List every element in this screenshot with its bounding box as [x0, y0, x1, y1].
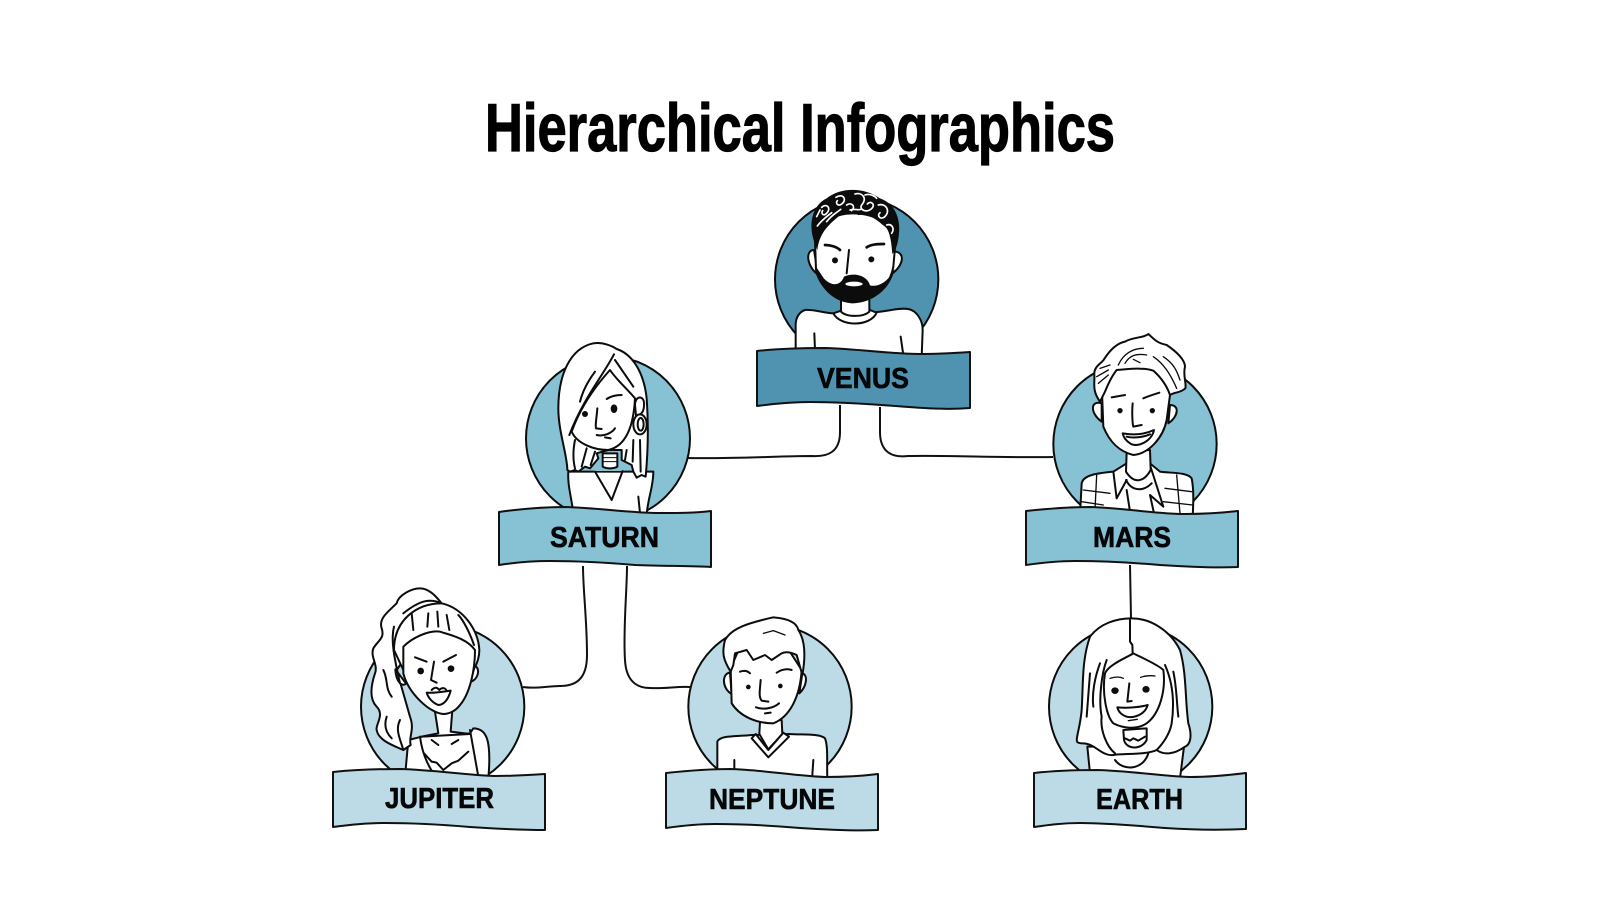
- banner: Earth: [1034, 770, 1246, 830]
- connectors: [523, 405, 1131, 688]
- title: Hierarchical Infographics: [485, 90, 1115, 166]
- node: Saturn: [499, 343, 711, 567]
- banner: Venus: [757, 348, 970, 409]
- arrow: Saturn to Jupiter: [523, 566, 587, 688]
- label: Mars: MARS: [1093, 522, 1171, 554]
- arrow: Venus to Saturn: [688, 405, 840, 458]
- label: Saturn: SATURN: [550, 522, 659, 554]
- banner: Mars: [1026, 507, 1238, 567]
- avatar: Earth: [1049, 618, 1212, 788]
- arrow: Mars to Earth: [1130, 565, 1131, 618]
- avatar: Neptune: [688, 617, 852, 788]
- node: Earth: [1034, 618, 1246, 830]
- label: Venus: VENUS: [817, 363, 909, 395]
- banner: Saturn: [499, 507, 711, 567]
- avatar: Mars: [1053, 334, 1217, 526]
- label: Jupiter: JUPITER: [385, 783, 494, 815]
- node: Neptune: [666, 617, 878, 830]
- label: Earth: EARTH: [1096, 784, 1183, 816]
- arrow: Saturn to Neptune: [624, 566, 690, 688]
- avatar: Venus: [775, 190, 938, 361]
- node: Mars: [1026, 334, 1238, 567]
- banner: Jupiter: [333, 769, 545, 830]
- avatar: Jupiter: [361, 588, 524, 788]
- banner: Neptune: [666, 769, 878, 830]
- label: Neptune: NEPTUNE: [709, 784, 835, 816]
- node: Venus: [757, 190, 970, 409]
- arrow: Venus to Mars: [880, 407, 1053, 457]
- avatar: Saturn: [526, 343, 690, 520]
- node: Jupiter: [333, 588, 545, 830]
